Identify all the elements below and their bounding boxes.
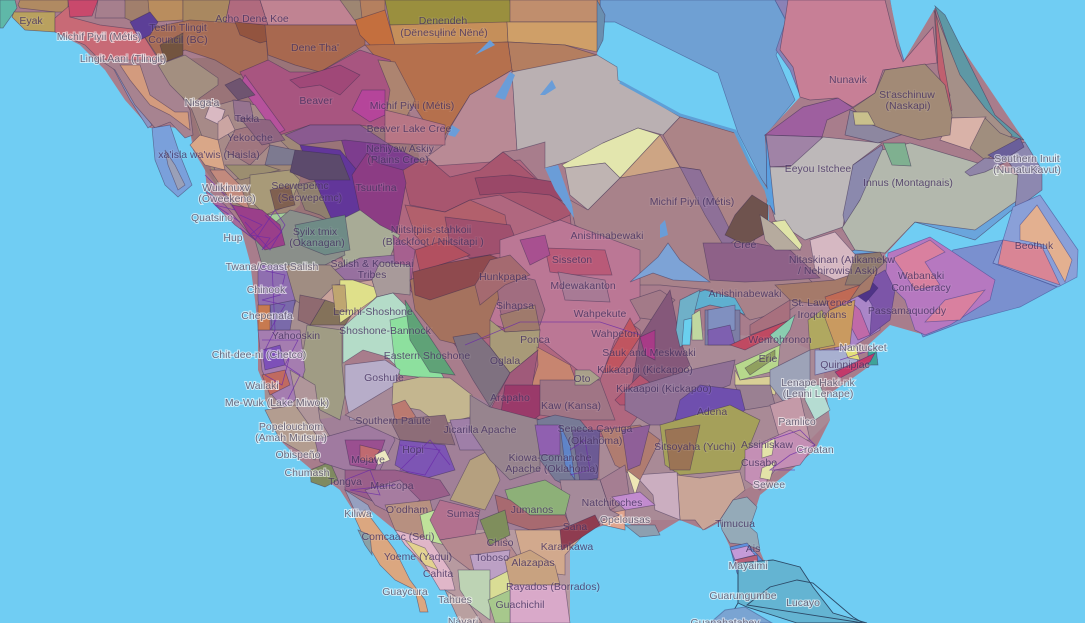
region: Hudson Bay overlay <box>600 0 940 190</box>
place labels: Southern Paiute <box>355 415 431 427</box>
place labels: Sana <box>563 521 587 533</box>
region: Texas and Oklahoma <box>495 415 620 575</box>
place labels: Opelousas <box>600 514 650 526</box>
place labels: Kiikaapoi (Kickapoo) <box>597 364 693 376</box>
place labels: Beaver <box>299 95 333 107</box>
place labels: Guarungumbe <box>709 590 777 602</box>
place labels: Kiowa-Comanche <box>509 452 592 464</box>
place labels: Sihapsa <box>496 300 534 312</box>
place labels: Confederacy <box>891 282 952 294</box>
place labels: Mojave <box>351 454 385 466</box>
place labels: Secwepemc <box>271 180 329 192</box>
place labels: Sauk and Meskwaki <box>602 347 696 359</box>
place labels: Maricopa <box>370 480 414 492</box>
region: central Canada <box>375 55 885 440</box>
place labels: Wabanaki <box>898 270 944 282</box>
place labels: xa'isla wa'wis (Haisla) <box>158 149 260 161</box>
place labels: / Nehirowisi Aski) <box>798 265 878 277</box>
place labels: Adena <box>697 406 727 418</box>
place labels: Jicarilla Apache <box>444 424 517 436</box>
region: western United States <box>258 255 615 515</box>
place labels: (Dënesųłiné Nëné) <box>400 27 488 39</box>
place labels: Yekooche <box>227 132 273 144</box>
place labels: St. Lawrence <box>791 297 853 309</box>
place labels: Nitaskinan (Atikamekw <box>789 254 896 266</box>
place labels: Takla <box>235 113 259 125</box>
place labels: Ponca <box>520 334 550 346</box>
place labels: Popelouchom <box>259 421 323 433</box>
place labels: Syilx tmix <box>293 226 338 238</box>
place labels: Chiso <box>487 537 514 549</box>
place labels: Wahpekute <box>574 308 627 320</box>
place labels: Oto <box>574 373 591 385</box>
place labels: Wailaki <box>245 380 279 392</box>
place labels: Comcaac (Seri) <box>362 531 434 543</box>
place labels: Teslin Tlingit <box>149 22 207 34</box>
place labels: (Amah Mutsun) <box>255 432 327 444</box>
Cuba <box>710 607 772 623</box>
place labels: Pamlico <box>778 416 816 428</box>
region: Newfoundland and Gulf of St. Lawrence <box>885 195 1078 337</box>
place labels: Arapaho <box>490 392 530 404</box>
place labels: Nehiyaw Askiy <box>366 143 435 155</box>
place labels: Sumas <box>447 508 479 520</box>
place labels: Michif Piyii (Métis) <box>57 31 141 43</box>
place labels: Seneca Cayuga <box>558 423 633 435</box>
region: Midwest and Great Lakes <box>603 290 830 425</box>
place labels: Rayados (Borrados) <box>506 581 600 593</box>
place labels: Me-Wuk (Lake Miwok) <box>225 397 329 409</box>
place labels: Jumanos <box>511 504 553 516</box>
place labels: (Naskapi) <box>886 100 930 112</box>
place labels: Sitsoyaha (Yuchi) <box>654 441 736 453</box>
place labels: Beothuk <box>1015 240 1054 252</box>
region: northern Canada band <box>0 0 605 138</box>
place labels: Kiikaapoi (Kickapoo) <box>616 383 712 395</box>
place labels: Chumash <box>285 467 330 479</box>
place labels: Sewee <box>753 479 785 491</box>
place labels: Goshute <box>364 372 404 384</box>
place labels: Dene Tha' <box>291 42 339 54</box>
place labels: Mdewakanton <box>550 280 616 292</box>
Bahamas territory <box>710 560 867 623</box>
place labels: Guachichil <box>495 599 545 611</box>
place labels: Oglala <box>490 355 520 367</box>
place labels: Salish & Kootenai <box>331 258 413 270</box>
place labels: (NunatuKavut) <box>993 164 1061 176</box>
place labels: Lingit Aani (Tlingit) <box>80 53 166 65</box>
lakes and rivers <box>448 40 668 238</box>
place labels: Guaycura <box>382 586 428 598</box>
place labels: Wuikinuxv <box>202 182 251 194</box>
place labels: Tsuut'ina <box>355 182 397 194</box>
place labels: Denendeh <box>419 15 467 27</box>
place labels: Acho Dene Koe <box>215 13 289 25</box>
place labels: O'odham <box>386 504 428 516</box>
place labels: Timucua <box>715 518 755 530</box>
place labels: (Oklahoma) <box>568 435 622 447</box>
place labels: Wahpeton <box>591 328 639 340</box>
place labels: Eastern Shoshone <box>384 350 470 362</box>
place labels: Niitsitpiis-stahkoii <box>391 224 471 236</box>
place labels: Shoshone-Bannock <box>339 325 432 337</box>
place labels: Eeyou Istchee <box>785 163 851 175</box>
place labels: (Oweekeno) <box>198 193 256 205</box>
place labels: Yoeme (Yaqui) <box>384 551 452 563</box>
place labels: Council (BC) <box>148 34 208 46</box>
region: New England <box>815 265 895 378</box>
place labels: Beaver Lake Cree <box>367 123 451 135</box>
region: Mexico and Baja <box>345 490 570 623</box>
place labels: Quatsino <box>191 212 233 224</box>
place labels: Cree <box>734 239 757 251</box>
place labels: Chit-dee-ni (Chetco) <box>212 349 306 361</box>
place labels: Cusabo <box>741 457 777 469</box>
place labels: Nantucket <box>839 342 887 354</box>
place labels: Kiliwa <box>344 508 372 520</box>
place labels: Obispeño <box>276 449 321 461</box>
place labels: (Blackfoot / Niitsitapi ) <box>382 236 484 248</box>
region: southeastern United States <box>600 395 815 592</box>
place labels: (Lenni Lenape) <box>783 388 853 400</box>
place labels: Kaw (Kansa) <box>541 400 601 412</box>
place labels: Eyak <box>19 15 43 27</box>
place labels: Michif Piyii (Métis) <box>370 100 454 112</box>
place labels: Tongva <box>328 476 362 488</box>
place labels: Southern Inuit <box>994 153 1060 165</box>
place labels: Tahues <box>438 594 472 606</box>
place labels: Wenrohronon <box>748 334 812 346</box>
place labels: Erie <box>759 353 777 365</box>
place labels: Innus (Montagnais) <box>863 177 953 189</box>
place labels: Chepenafa <box>241 310 293 322</box>
place labels: Hunkpapa <box>479 271 527 283</box>
place labels: (Okanagan) <box>289 237 345 249</box>
place labels: Alazapas <box>511 557 555 569</box>
place labels: Apache (Oklahoma) <box>505 463 599 475</box>
place labels: Sisseton <box>552 254 592 266</box>
place labels: Anishinabewaki <box>709 288 781 300</box>
place labels: Tribes <box>358 269 386 281</box>
place labels: Lemhi-Shoshone <box>333 306 413 318</box>
place labels: Karankawa <box>541 541 593 553</box>
place labels: Mayaimi <box>728 560 768 572</box>
place labels: Ais <box>746 543 760 555</box>
place labels: Lenape Haki-nk <box>781 377 856 389</box>
place labels: Assiniskaw <box>741 439 793 451</box>
place labels: Quinnipiac <box>820 359 870 371</box>
Hudson Bay coast line <box>620 82 770 205</box>
place labels: Chinook <box>247 284 286 296</box>
place labels: Anishinabewaki <box>571 230 643 242</box>
region: Nunavik and Labrador <box>765 0 1042 255</box>
place labels: Twana/Coast Salish <box>226 261 319 273</box>
place labels: Lucayo <box>786 597 820 609</box>
place labels: Yahooskin <box>272 330 320 342</box>
place labels: Iroquoians <box>797 309 847 321</box>
place labels: Toboso <box>475 552 509 564</box>
place labels: Natchitoches <box>582 497 642 509</box>
place labels: Nisga'a <box>185 97 219 109</box>
place labels: Cahita <box>423 568 453 580</box>
place labels: Hup <box>223 232 243 244</box>
place labels: St'aschinuw <box>879 89 935 101</box>
place labels: Nunavik <box>829 74 868 86</box>
place labels: Hopi <box>402 444 424 456</box>
place labels: Michif Piyii (Métis) <box>650 196 734 208</box>
place labels: Passamaquoddy <box>868 305 947 317</box>
region: Pacific northwest <box>152 50 445 290</box>
territory boundary detail: west coast <box>205 175 880 495</box>
place labels: (Plains Cree) <box>367 154 429 166</box>
place labels: (Secwepemc) <box>278 192 342 204</box>
place labels: Croatan <box>796 444 834 456</box>
